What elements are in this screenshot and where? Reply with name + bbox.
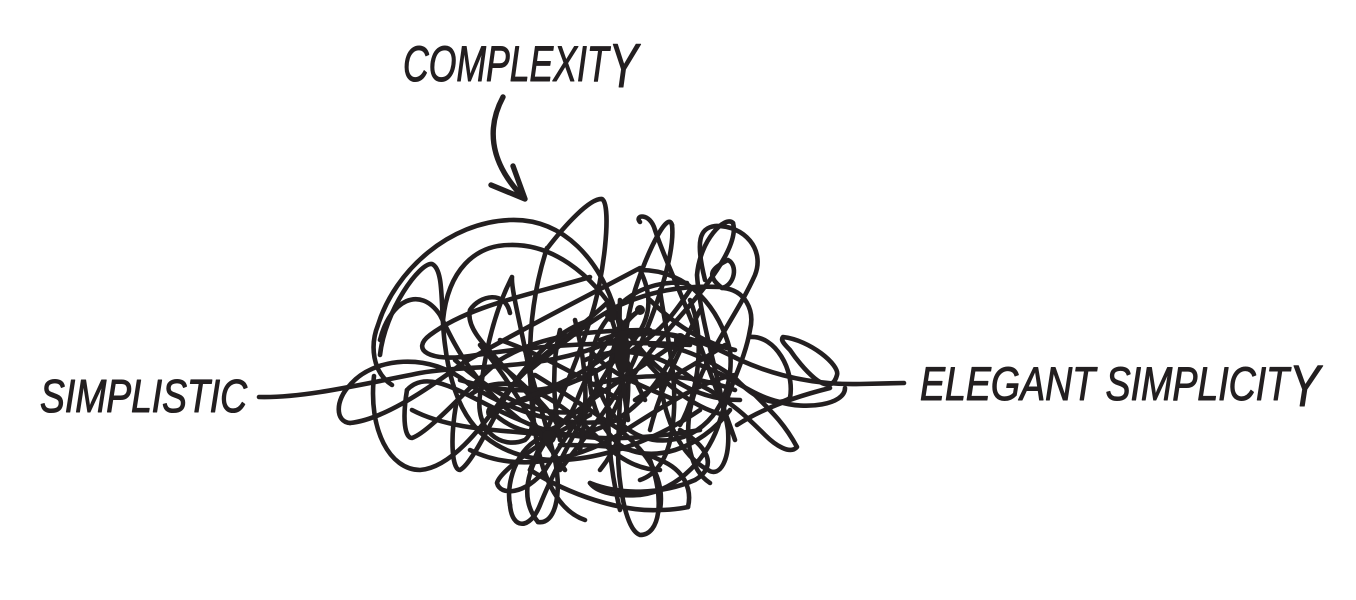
label: complexity: Y [609, 32, 641, 101]
scribble: dense knots where the lines overlap [486, 305, 686, 444]
label: elegant simplicity: Y [1289, 354, 1323, 419]
scribble: tangled line from simplistic to elegant simplicity [259, 199, 904, 535]
label: complexity: COMPLEXIT [403, 36, 692, 92]
label: simplistic: SIMPLISTIC [40, 370, 248, 422]
arrow: complexity pointing to the tangle [491, 97, 525, 199]
